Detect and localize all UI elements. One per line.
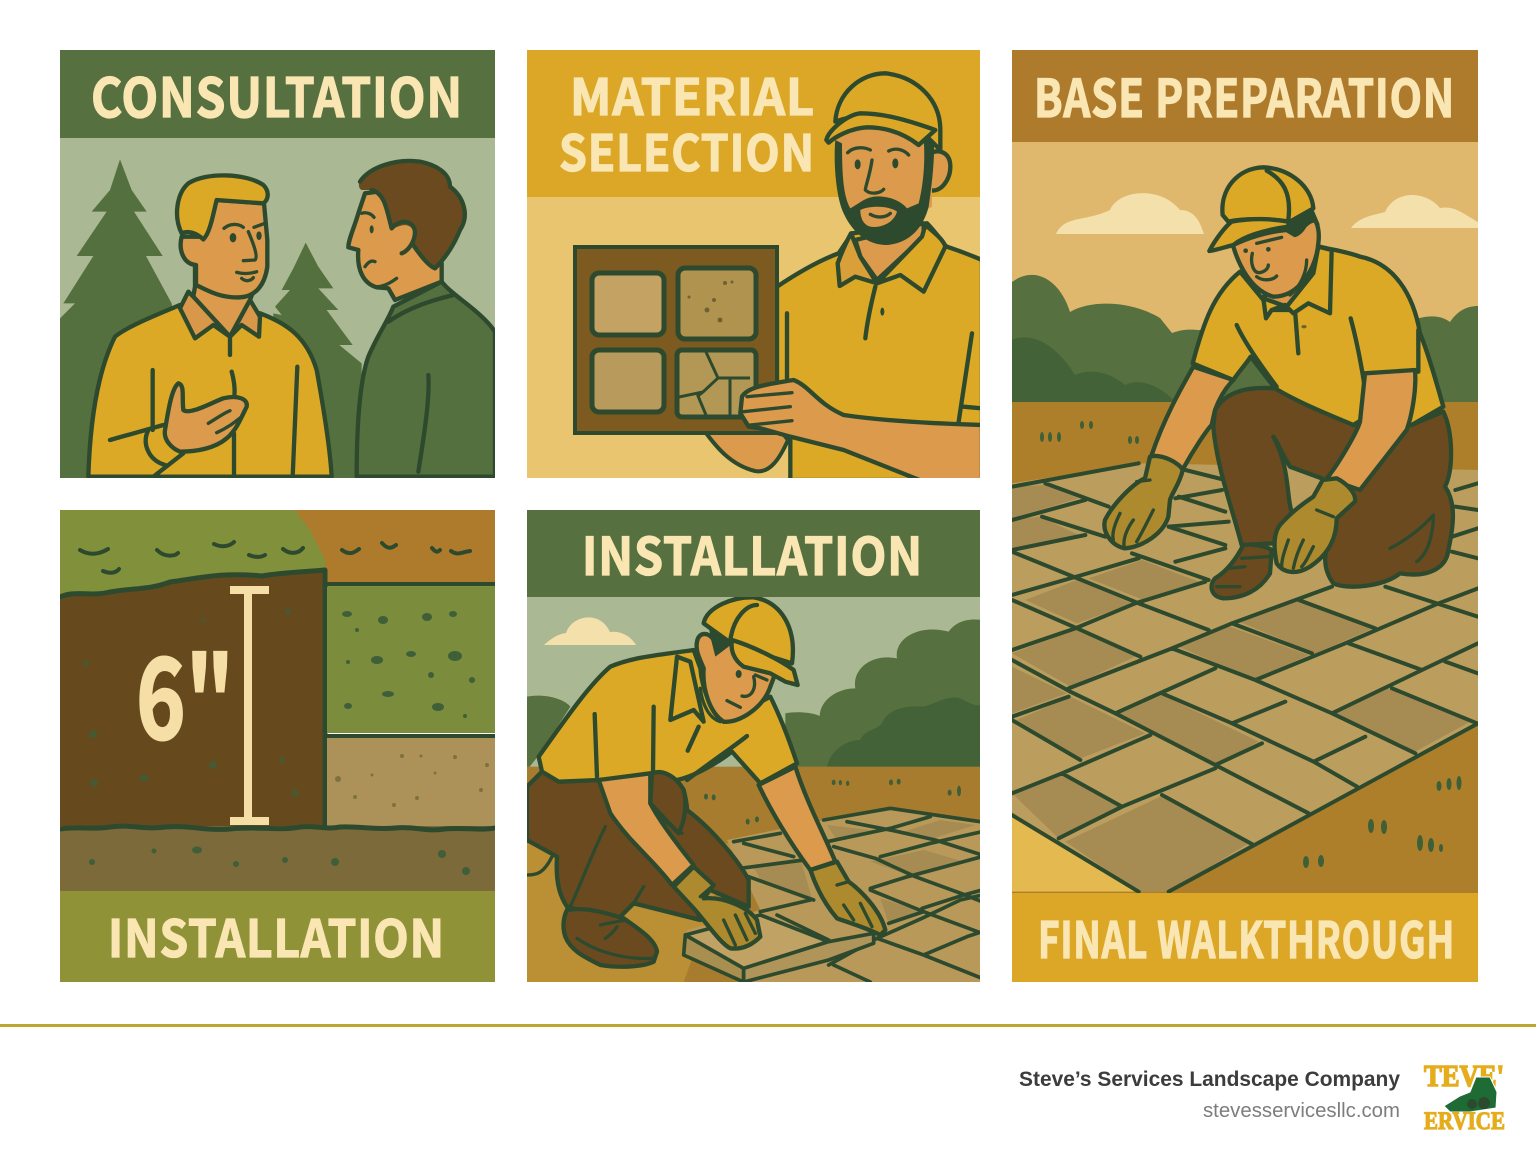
brown soil layer: [60, 570, 325, 826]
heading: installation: INSTALLATION: [582, 515, 923, 590]
soil edge: [60, 570, 325, 826]
panel: excavation cross-section: [60, 510, 495, 982]
man with beard: [777, 73, 982, 480]
panel background: [60, 138, 495, 374]
bushes: [1012, 275, 1478, 404]
lower wavy line: [60, 826, 495, 830]
heading: installation: INSTALLATION: [108, 898, 445, 972]
grass marks: [80, 542, 470, 573]
website: stevesservicesllc.com: [1203, 1100, 1400, 1122]
logo: [1424, 1058, 1505, 1135]
left bush: [527, 696, 570, 770]
heading: material selection: [560, 77, 813, 172]
front paver block: [684, 935, 744, 982]
crouching worker: [527, 597, 885, 967]
heading: material selection: SELECTION: [559, 114, 815, 186]
grass tufts top: [1040, 421, 1139, 444]
ground: [527, 767, 982, 983]
heading: material selection: MATERIAL: [570, 58, 815, 130]
trees: [60, 159, 362, 478]
logo: ERVICE: [1424, 1108, 1505, 1135]
depth marker: [230, 586, 269, 825]
grass band: [60, 510, 495, 594]
lower grass tufts: [1303, 776, 1462, 868]
layer dividers: [327, 584, 495, 736]
panel: material selection: [527, 50, 982, 482]
green layer: [327, 587, 495, 733]
dark bushes: [1012, 337, 1175, 402]
consultation scene: [60, 159, 495, 478]
lower soil specks: [89, 846, 470, 875]
sand specks: [335, 754, 489, 807]
sky: [527, 597, 980, 777]
paved area: [684, 808, 982, 983]
ground: [1012, 402, 1478, 902]
clouds: [1056, 193, 1478, 234]
sky: [1012, 142, 1478, 333]
panel: base preparation: [1012, 50, 1478, 982]
heading band: [1012, 50, 1478, 142]
panel background: [527, 197, 980, 478]
heading band: [527, 50, 980, 197]
orange soil band: [295, 510, 495, 585]
panel: consultation: [60, 50, 495, 478]
man in green shirt: [348, 161, 495, 477]
footer divider: [0, 1024, 1536, 1027]
heading: consultation: CONSULTATION: [91, 54, 463, 133]
logo: TEVE': [1424, 1058, 1504, 1093]
kneeling worker: [1104, 167, 1453, 598]
heading band: [527, 510, 980, 597]
depth label 6 inches: 6": [136, 610, 234, 772]
green layer marks: [342, 611, 475, 718]
lower soil band: [60, 826, 495, 891]
footer band: [60, 891, 495, 982]
installation scene: [527, 597, 982, 983]
holding arm and hand: [740, 380, 982, 482]
gap tile: [1287, 470, 1317, 513]
man in yellow shirt: [88, 175, 332, 477]
lower hand: [706, 430, 788, 471]
soil specks: [83, 609, 298, 796]
bushes: [785, 619, 982, 768]
heading band: [60, 50, 495, 138]
dark bushes: [827, 698, 982, 768]
panel: installation: [527, 510, 982, 983]
ground marks: [704, 779, 961, 825]
sand layer: [327, 738, 495, 826]
footer band: [1012, 893, 1478, 982]
paved area: [1012, 463, 1478, 892]
cloud: [544, 617, 636, 645]
company name: Steve’s Services Landscape Company: [1019, 1068, 1400, 1091]
sample board: [575, 247, 777, 433]
